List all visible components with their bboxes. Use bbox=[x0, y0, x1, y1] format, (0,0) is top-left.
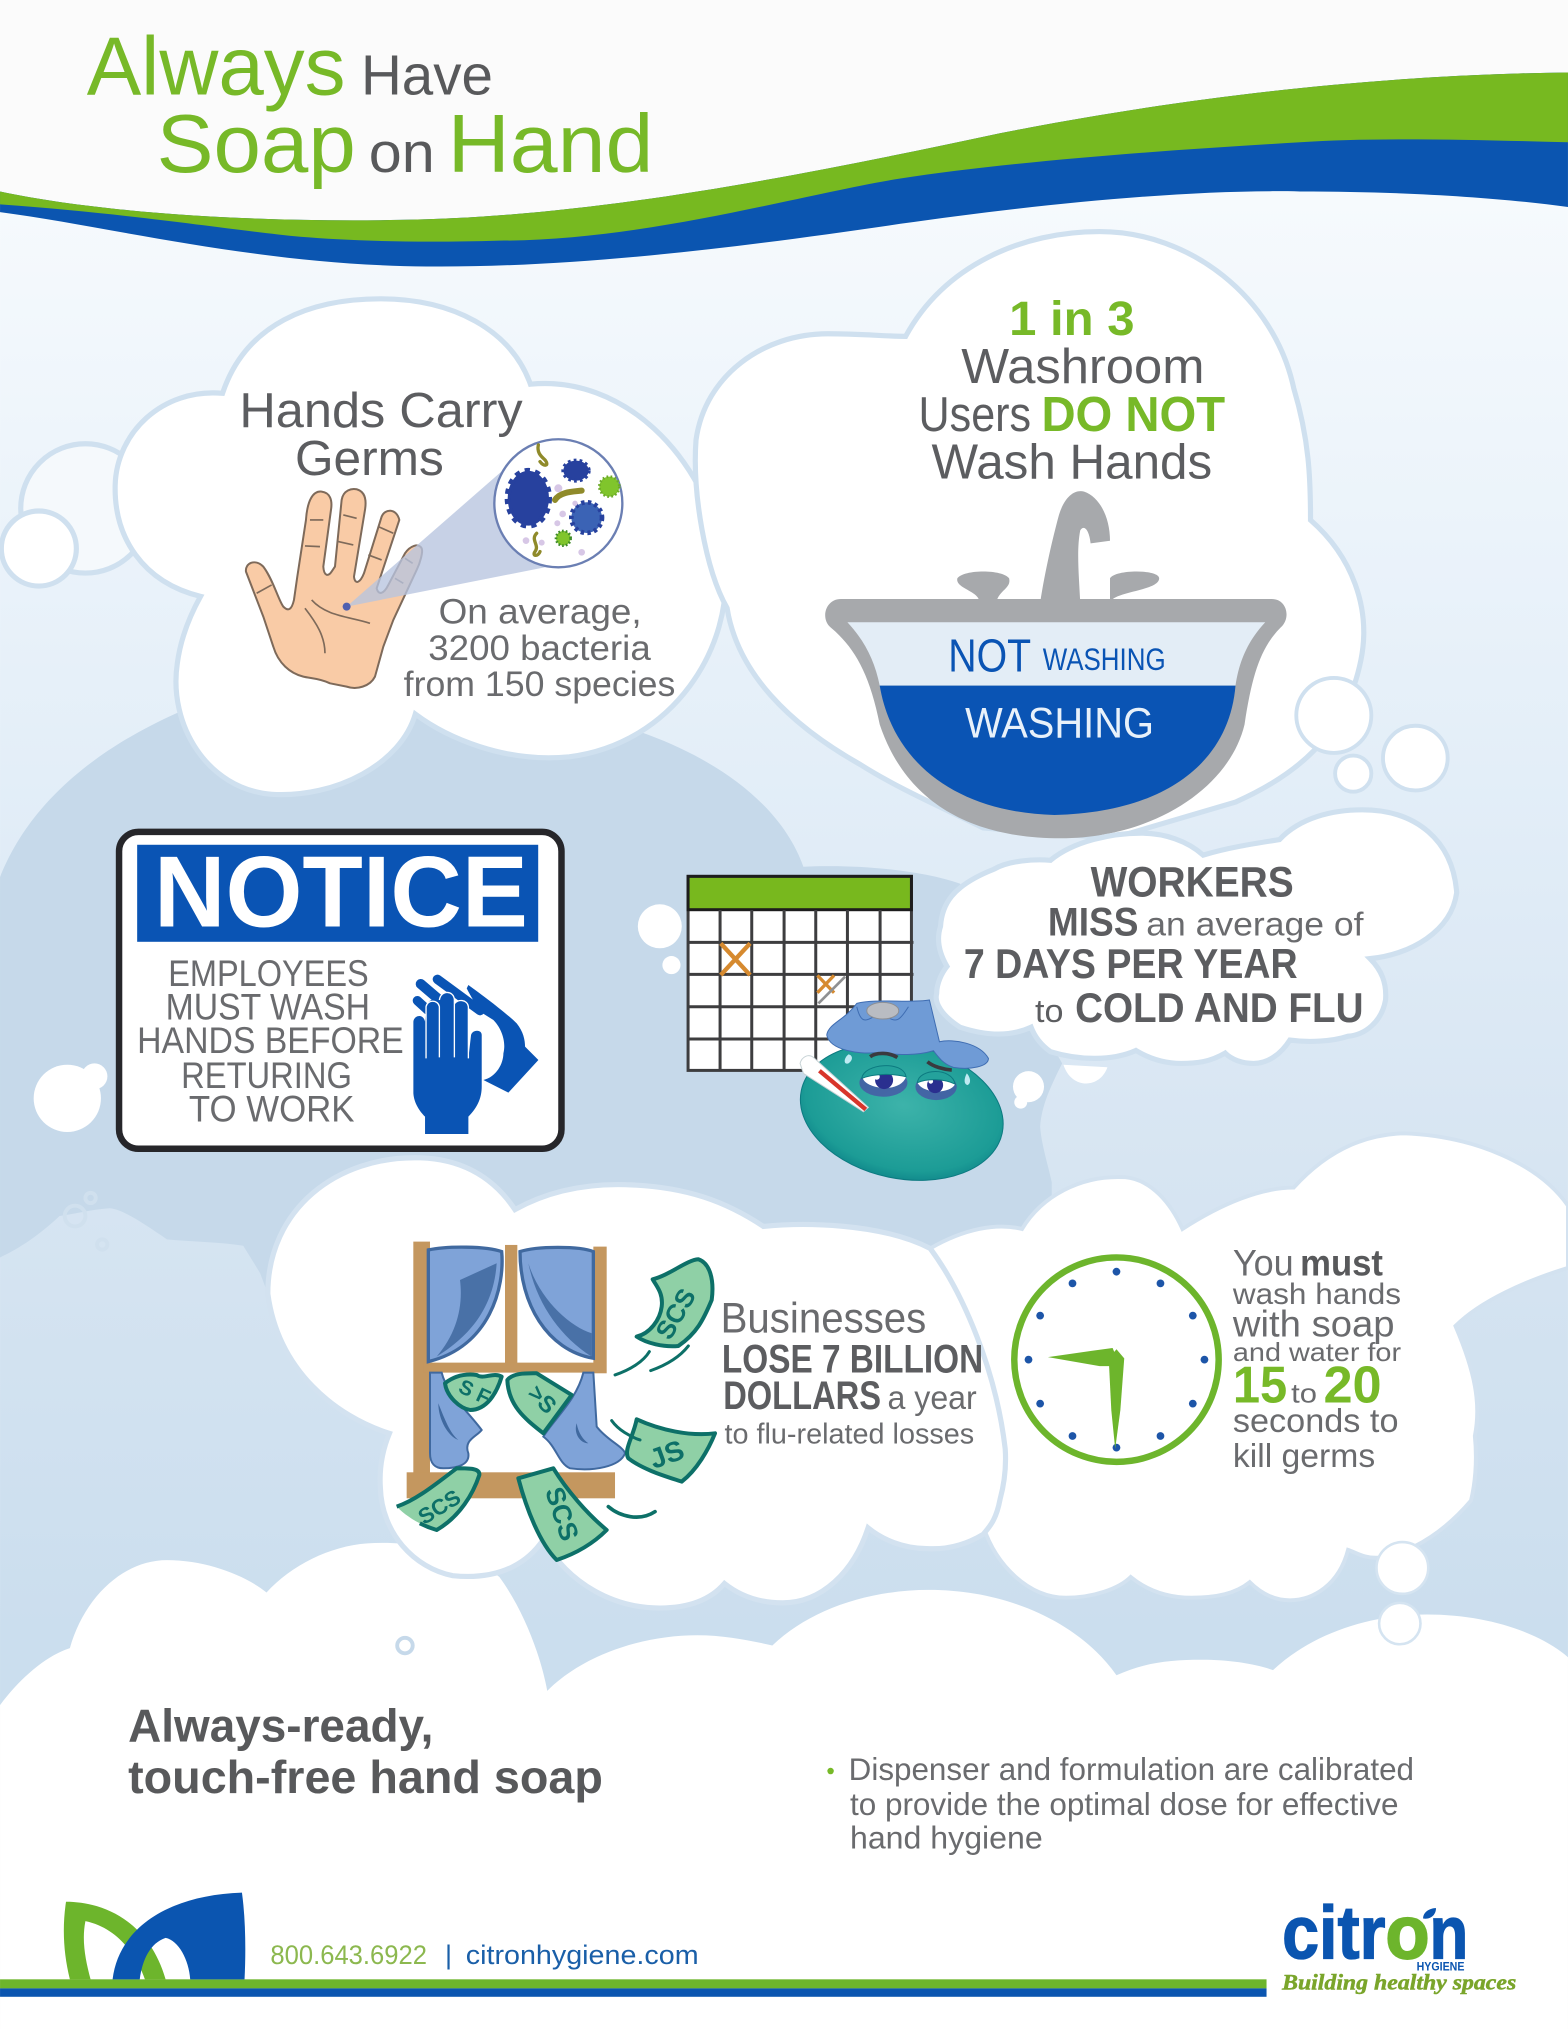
workers text: MISS bbox=[1048, 900, 1138, 944]
icon: window with money flying out: SCS bbox=[414, 1484, 465, 1530]
title: Soap bbox=[157, 97, 356, 190]
citron logo bbox=[1281, 1891, 1516, 1995]
small ring bubble bbox=[397, 1638, 413, 1653]
icon: clock bbox=[1014, 1257, 1219, 1462]
caption: from 150 species bbox=[404, 665, 675, 704]
workers text: to bbox=[1035, 993, 1063, 1029]
header band bbox=[0, 0, 1568, 267]
panel: 15 to 20 seconds clock bbox=[930, 1133, 1568, 1600]
icon: hand and magnified germs bbox=[246, 439, 622, 688]
heading: Washroom bbox=[961, 340, 1204, 394]
citron logo: o bbox=[1386, 1891, 1430, 1975]
panel: 1 in 3 washroom users bbox=[695, 232, 1364, 838]
heading bbox=[239, 384, 523, 486]
product bullet: to provide the optimal dose for effective bbox=[850, 1787, 1398, 1822]
citron logo: citr bbox=[1282, 1891, 1386, 1975]
icon: window with money flying out: >S bbox=[523, 1380, 562, 1419]
bubbles right of sink cloud bbox=[1296, 678, 1448, 792]
notice header: NOTICE bbox=[154, 836, 528, 948]
business text: to flu-related losses bbox=[724, 1419, 974, 1451]
caption: 3200 bacteria bbox=[428, 629, 651, 668]
heading: Wash Hands bbox=[931, 436, 1212, 490]
clock text: You bbox=[1233, 1242, 1294, 1284]
workers text: WORKERS bbox=[1091, 859, 1294, 907]
icon: window with money flying out bbox=[397, 1242, 715, 1560]
product bullet: Dispenser and formulation are calibrated bbox=[849, 1752, 1414, 1787]
business text bbox=[721, 1294, 983, 1451]
bubbles beside notice sign bbox=[34, 1063, 107, 1132]
footer stripes bbox=[0, 1979, 1267, 1997]
icon: window with money flying out: SCS bbox=[649, 1283, 702, 1344]
notice text: MUST WASH bbox=[166, 985, 370, 1027]
clock text: wash hands bbox=[1232, 1278, 1401, 1311]
bubbles left of germs cloud bbox=[1, 444, 150, 586]
cloud outline bbox=[695, 232, 1364, 838]
clock text: 20 bbox=[1323, 1355, 1382, 1413]
sick face bbox=[787, 1000, 1016, 1198]
panel: notice sign bbox=[119, 832, 561, 1149]
heading: DO NOT bbox=[1041, 388, 1225, 442]
notice text: HANDS BEFORE bbox=[137, 1019, 404, 1061]
icon: footer leaf mark bbox=[64, 1893, 245, 1979]
cloud outline bbox=[930, 1133, 1568, 1600]
panel: businesses lose money bbox=[268, 1158, 1006, 1608]
bills bbox=[397, 1259, 715, 1560]
icon: window with money flying out: SCS bbox=[539, 1483, 585, 1545]
caption: On average, bbox=[439, 593, 642, 632]
citron logo: Building healthy spaces bbox=[1281, 1970, 1516, 1995]
citron logo: HYGIENE bbox=[1417, 1960, 1465, 1973]
background dark blob bbox=[0, 695, 1062, 1294]
cloud outline bbox=[268, 1158, 1006, 1608]
heading bbox=[919, 293, 1225, 490]
product bullet bbox=[827, 1752, 1414, 1856]
title: Have bbox=[361, 43, 493, 107]
notice text bbox=[137, 952, 404, 1130]
clock text: must bbox=[1300, 1242, 1383, 1284]
clock text: seconds to bbox=[1233, 1403, 1398, 1440]
clock text bbox=[1232, 1242, 1402, 1475]
panel: hands carry germs bbox=[115, 299, 726, 795]
faint background bubbles bbox=[65, 1193, 107, 1250]
sink labels bbox=[948, 629, 1166, 747]
clock text: and water for bbox=[1233, 1339, 1402, 1367]
clock text: with soap bbox=[1232, 1302, 1395, 1344]
icon: sink bbox=[825, 491, 1287, 838]
icon: calendar and sick face bbox=[688, 876, 1016, 1198]
heading: Users bbox=[919, 388, 1031, 442]
notice text: RETURING bbox=[181, 1054, 352, 1096]
business text: Businesses bbox=[721, 1294, 926, 1342]
workers text: an average of bbox=[1146, 906, 1364, 943]
icon: window with money flying out: S F bbox=[455, 1375, 494, 1410]
workers text bbox=[964, 859, 1364, 1031]
product heading: Always-ready, bbox=[128, 1699, 433, 1751]
icon: window with money flying out: JS bbox=[645, 1434, 688, 1475]
business text: LOSE 7 BILLION bbox=[722, 1338, 983, 1382]
product heading bbox=[128, 1699, 603, 1803]
cloud outline bbox=[115, 299, 726, 795]
product bullet: hand hygiene bbox=[850, 1821, 1043, 1856]
calendar bbox=[688, 876, 913, 1071]
bubbles beside sick emoji bbox=[1013, 1065, 1107, 1109]
heading: Hands Carry bbox=[239, 384, 523, 438]
citron logo: n bbox=[1430, 1891, 1468, 1975]
title: Hand bbox=[448, 97, 653, 190]
business text: DOLLARS bbox=[723, 1374, 881, 1418]
footer contact bbox=[270, 1939, 699, 1970]
sink labels: WASHING bbox=[965, 699, 1154, 747]
clock text: kill germs bbox=[1233, 1438, 1375, 1475]
product heading: touch-free hand soap bbox=[128, 1751, 603, 1803]
footer contact: 800.643.6922 bbox=[270, 1939, 427, 1970]
notice text: EMPLOYEES bbox=[168, 952, 369, 994]
heading: Germs bbox=[295, 432, 444, 486]
notice text: TO WORK bbox=[189, 1088, 354, 1130]
caption bbox=[404, 593, 675, 704]
clock text: 15 bbox=[1233, 1355, 1287, 1413]
heading: 1 in 3 bbox=[1009, 293, 1135, 346]
bubbles beside calendar bbox=[638, 904, 682, 974]
business text: a year bbox=[887, 1380, 977, 1417]
clock text: to bbox=[1291, 1377, 1317, 1408]
title: on bbox=[369, 121, 435, 185]
panel: workers cloud bbox=[936, 810, 1457, 1063]
sink labels: NOT bbox=[948, 629, 1031, 681]
footer contact: citronhygiene.com bbox=[466, 1939, 699, 1970]
icon: washing hands bbox=[413, 979, 538, 1134]
title bbox=[87, 19, 653, 190]
bubbles below clock cloud bbox=[1377, 1542, 1428, 1644]
sink labels: WASHING bbox=[1043, 642, 1166, 677]
title: Always bbox=[87, 19, 345, 112]
bottom cloud bbox=[0, 1543, 1568, 2029]
workers text: COLD AND FLU bbox=[1075, 985, 1364, 1031]
workers text: 7 DAYS PER YEAR bbox=[964, 941, 1298, 987]
footer contact: | bbox=[445, 1939, 452, 1970]
